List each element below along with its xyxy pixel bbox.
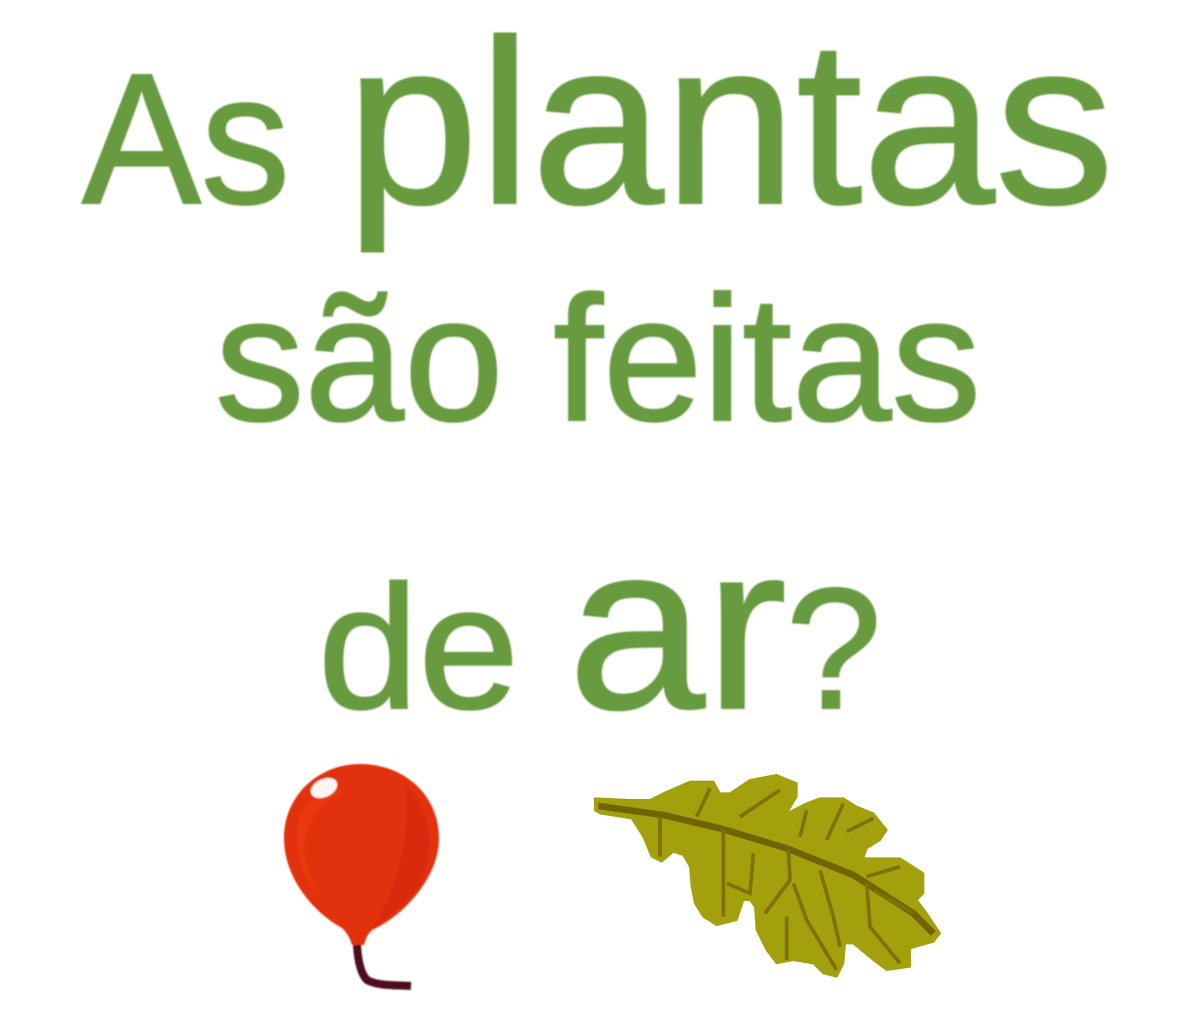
balloon highlight xyxy=(308,774,340,802)
title line 1: As xyxy=(82,36,290,243)
title line 3: de xyxy=(318,550,519,746)
leaf veins xyxy=(660,788,913,970)
title line 2: são feitas xyxy=(215,259,981,458)
balloon string xyxy=(357,945,411,986)
title line 3: ? xyxy=(786,553,882,745)
title xyxy=(82,0,1114,759)
leaf midrib xyxy=(598,806,933,933)
title line 3 xyxy=(318,495,882,759)
title line 3: ar xyxy=(568,495,787,759)
icon: oak leaf xyxy=(595,775,940,977)
icon: red balloon xyxy=(284,764,439,986)
